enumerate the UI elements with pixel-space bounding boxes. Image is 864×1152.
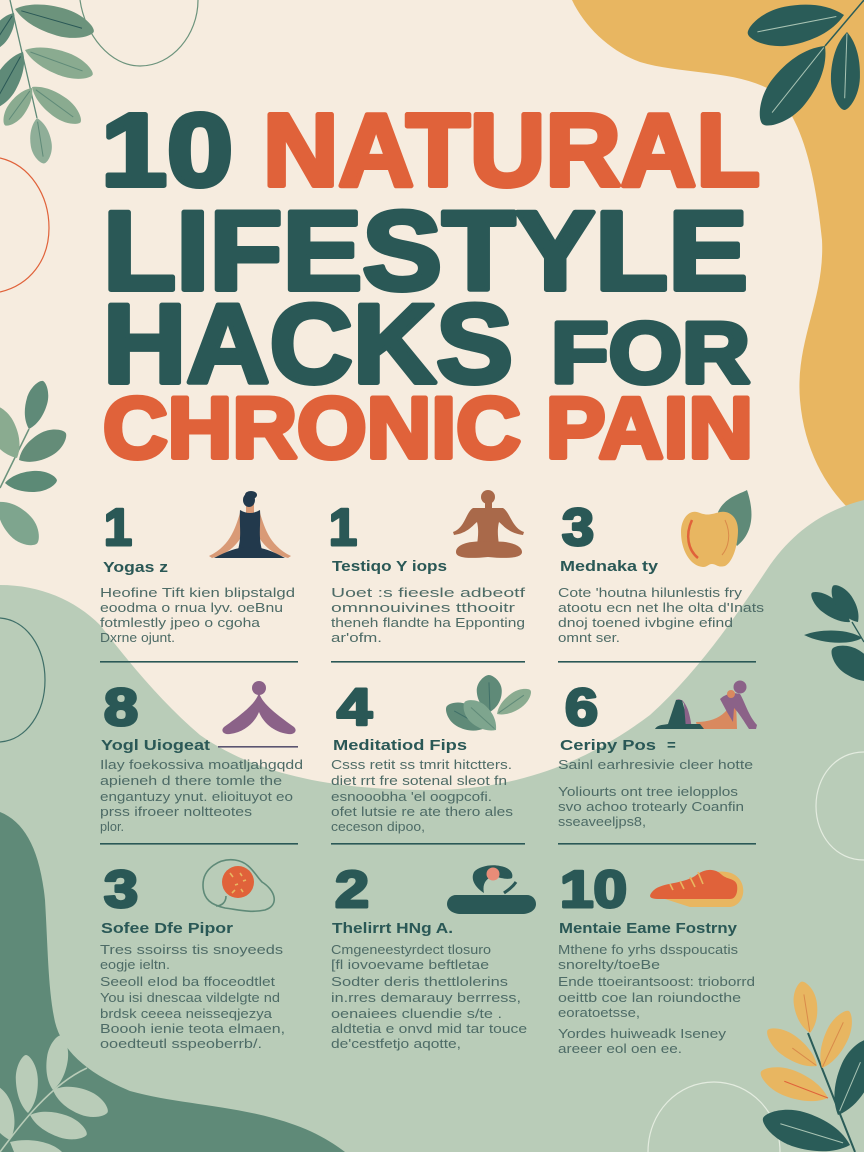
title: FOR [551,306,750,402]
divider [558,843,756,845]
body text: Yordes huiweadk Iseney [558,1026,727,1041]
number: 10 [560,861,627,919]
divider [100,661,298,663]
orange corner blob [572,0,864,522]
body text: Sainl earhresivie cleer hotte [558,757,753,772]
body text: brdsk ceeea neisseqjezya [100,1006,273,1021]
number: 2 [335,861,369,919]
small equals mark: = [667,737,676,754]
heading: Thelirrt HNg A. [332,920,453,937]
body text: ceceson dipoo, [331,819,425,834]
body text [100,942,285,1051]
body text [558,585,765,645]
heading: Mednaka ty [560,558,659,575]
body text: diet rrt fre sotenal sleot fn [331,773,507,788]
tip 8 [100,679,303,834]
body text: Csss retit ss tmrit hitctters. [331,757,512,772]
body text: ar'ofm. [331,630,382,645]
tip 2 [329,490,526,645]
body text: ooedteutl sspeoberrb/. [100,1036,262,1051]
icon: seated yoga woman [209,491,291,558]
tip 10 [558,861,755,1056]
leaves: mid right [804,580,864,691]
heading: Yogas z [103,559,168,576]
icon: seated figure [453,490,524,558]
leaves: top right [744,0,864,137]
title [101,92,760,476]
line arc: bottom [648,1082,780,1152]
body text: fotmlestly jpeo o cgoha [100,615,261,630]
number: 6 [565,679,598,737]
dark sage blob [0,812,345,1152]
heading: Testiqo Y iops [332,558,447,575]
body text: areeer eol oen ee. [558,1041,682,1056]
body text: eoratoetsse, [558,1005,640,1020]
leaves: bottom left [0,1034,112,1152]
body text: eoodma o rnua lyv. oeBnu [100,600,283,615]
title: 10 [101,92,233,208]
body text: Boooh ienie teota elmaen, [100,1021,285,1036]
tip 1 [100,491,295,645]
title: NATURAL [263,92,760,208]
heading: Mentaie Eame Fostrny [559,920,738,937]
divider [331,843,525,845]
icon: reclining figure on mat [447,865,536,914]
body text: engantuzy ynut. elioituyot eo [100,789,293,804]
body text: svo achoo trotearly Coanfin [558,799,744,814]
body text: snorelty/toeBe [558,957,660,972]
body text: de'cestfetjo aqotte, [331,1036,461,1051]
body text: oeittb coe lan roiundocthe [558,990,741,1005]
line arc: red [0,158,49,292]
number: 3 [104,861,138,919]
body text: atootu ecn net lhe olta d'Inats [558,600,765,615]
heading: Ceripy Pos [560,737,656,754]
number: 4 [337,679,372,737]
body text [100,757,303,834]
body text [331,585,526,645]
body text: Ende ttoeirantsoost: trioborrd [558,974,755,989]
purple rule [218,746,298,748]
heading: Yogl Uiogeat [101,737,210,754]
tip 6 [558,679,757,829]
tip 2b [331,861,536,1051]
body text: oenaiees cluendie s/te . [331,1006,502,1021]
body text [558,942,755,1056]
title: LIFESTYLE [103,188,748,314]
divider [100,843,298,845]
body text: ofet lutsie re ate thero ales [331,804,514,819]
heading: Meditatiod Fips [333,737,467,754]
title: CHRONIC PAIN [103,380,753,476]
body text: Mthene fo yrhs dsspoucatis [558,942,739,957]
number: 8 [104,679,138,737]
tip 4 [331,675,535,834]
line arc: right [816,752,864,860]
leaves: top left [0,0,98,165]
body text: Heofine Tift kien blipstalgd [100,585,295,600]
body text: [fl iovoevame beftletae [331,957,489,972]
line arc: top left [80,0,198,66]
body text: aldtetia e onvd mid tar touce [331,1021,527,1036]
body text: Dxrne ojunt. [100,630,175,645]
divider [331,661,525,663]
number: 3 [562,499,594,557]
body text: You isi dnescaa vildelgte nd [100,990,280,1005]
line arc: left [0,618,45,742]
leaves: bottom right [756,980,864,1152]
body text [331,757,514,834]
body text: eogje ieltn. [100,957,170,972]
body text: Uoet :s fieesle adbeotf [331,585,526,600]
number: 1 [329,499,357,557]
tip 3b [100,860,285,1051]
body text: dnoj toened ivbgine efind [558,615,733,630]
body text: omnt ser. [558,630,620,645]
body text: Seeoll eIod ba ffoceodtlet [100,974,275,989]
body text: Ilay foekossiva moatljahgqdd [100,757,303,772]
number: 1 [104,499,132,557]
body text: Sodter deris thettlolerins [331,974,509,989]
icon: purple pose [222,681,296,734]
body text: sseaveeljps8, [558,814,646,829]
icon: shoe [650,870,743,907]
body text: Yoliourts ont tree ielopplos [558,784,739,799]
tip 3 [558,490,765,645]
body text: Tres ssoirss tis snoyeeds [100,942,284,957]
body text: plor. [100,819,124,834]
divider [558,661,756,663]
heading: Sofee Dfe Pipor [101,920,233,937]
body text: esnooobha 'el oogpcofi. [331,789,492,804]
body text: apieneh d there tomle the [100,773,282,788]
body text: Cmgeneestyrdect tlosuro [331,942,491,957]
icon: herb leaves [441,675,535,738]
body text [331,942,527,1051]
body text: in.rres demarauy berrress, [331,990,521,1005]
body text: omnnouivines tthooitr [331,600,516,615]
body text: prss ifroeer noltteotes [100,804,253,819]
title: HACKS [103,280,513,406]
body text [558,757,753,829]
sage wave [0,500,864,1152]
body text: theneh flandte ha Epponting [331,615,525,630]
icon: apple and leaf [681,490,751,567]
icon: stretching figure [655,680,757,729]
icon: pain spot in outline [203,860,274,911]
leaves: mid left [0,378,72,553]
body text [100,585,295,645]
body text: Cote 'houtna hilunlestis fry [558,585,743,600]
